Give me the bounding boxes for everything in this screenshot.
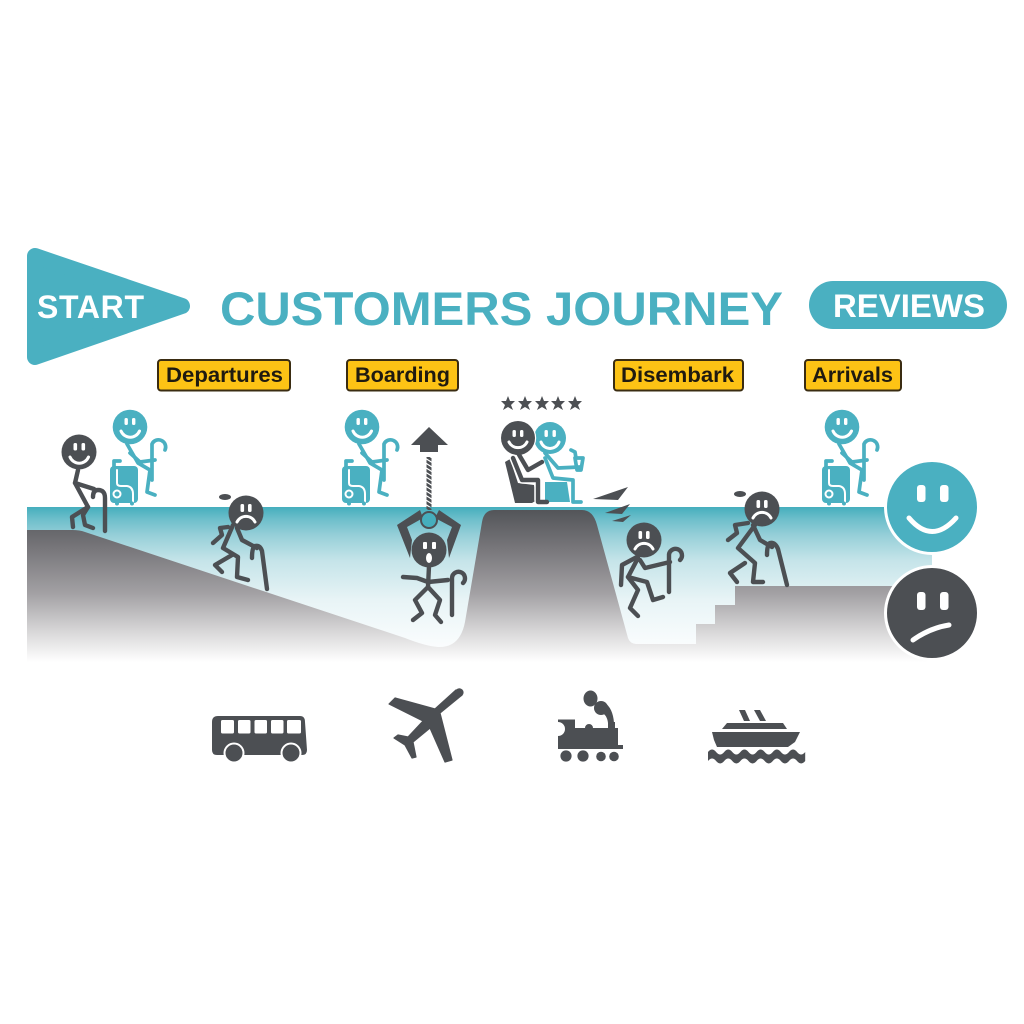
icon: ship — [708, 710, 805, 764]
figure: sad traveller falling off edge — [621, 522, 682, 616]
label: arrivals: Arrivals — [812, 364, 893, 387]
icon: motion lines beside cliff — [593, 487, 631, 522]
label: arrivals — [805, 360, 901, 390]
label: boarding — [347, 360, 458, 390]
reviews badge — [809, 281, 1007, 329]
start arrow: START — [37, 289, 144, 325]
label: departures — [158, 360, 290, 390]
icon: steam train — [558, 690, 623, 762]
label: disembark — [614, 360, 743, 390]
title: CUSTOMERS JOURNEY — [220, 283, 783, 336]
label: departures: Departures — [166, 364, 283, 387]
figure: happy traveller on suitcase, departures — [110, 410, 166, 506]
figure: happy traveller on suitcase, arrivals — [822, 410, 878, 506]
reviews badge: REVIEWS — [833, 288, 985, 324]
label: boarding: Boarding — [355, 364, 450, 387]
icon: big happy face — [886, 460, 978, 554]
figure: happy traveller on suitcase, boarding — [342, 410, 398, 506]
figure: sad walker on downhill slope — [213, 494, 267, 589]
icon: bus — [212, 716, 307, 762]
icon: big sad face — [886, 566, 978, 660]
rating stars — [501, 396, 582, 410]
journey terrain — [27, 507, 932, 662]
figure: happy walker with cane — [62, 434, 105, 531]
figures: happy couple seated in comfort — [500, 420, 583, 503]
figure: sad walker on stairs — [728, 491, 787, 585]
figure: startled traveller lifted by claw — [403, 532, 465, 622]
icon: airplane — [389, 688, 464, 762]
start arrow — [35, 256, 182, 357]
arrow and chain lift — [411, 427, 448, 510]
icon: lifting claw — [397, 510, 461, 558]
label: disembark: Disembark — [621, 364, 734, 387]
